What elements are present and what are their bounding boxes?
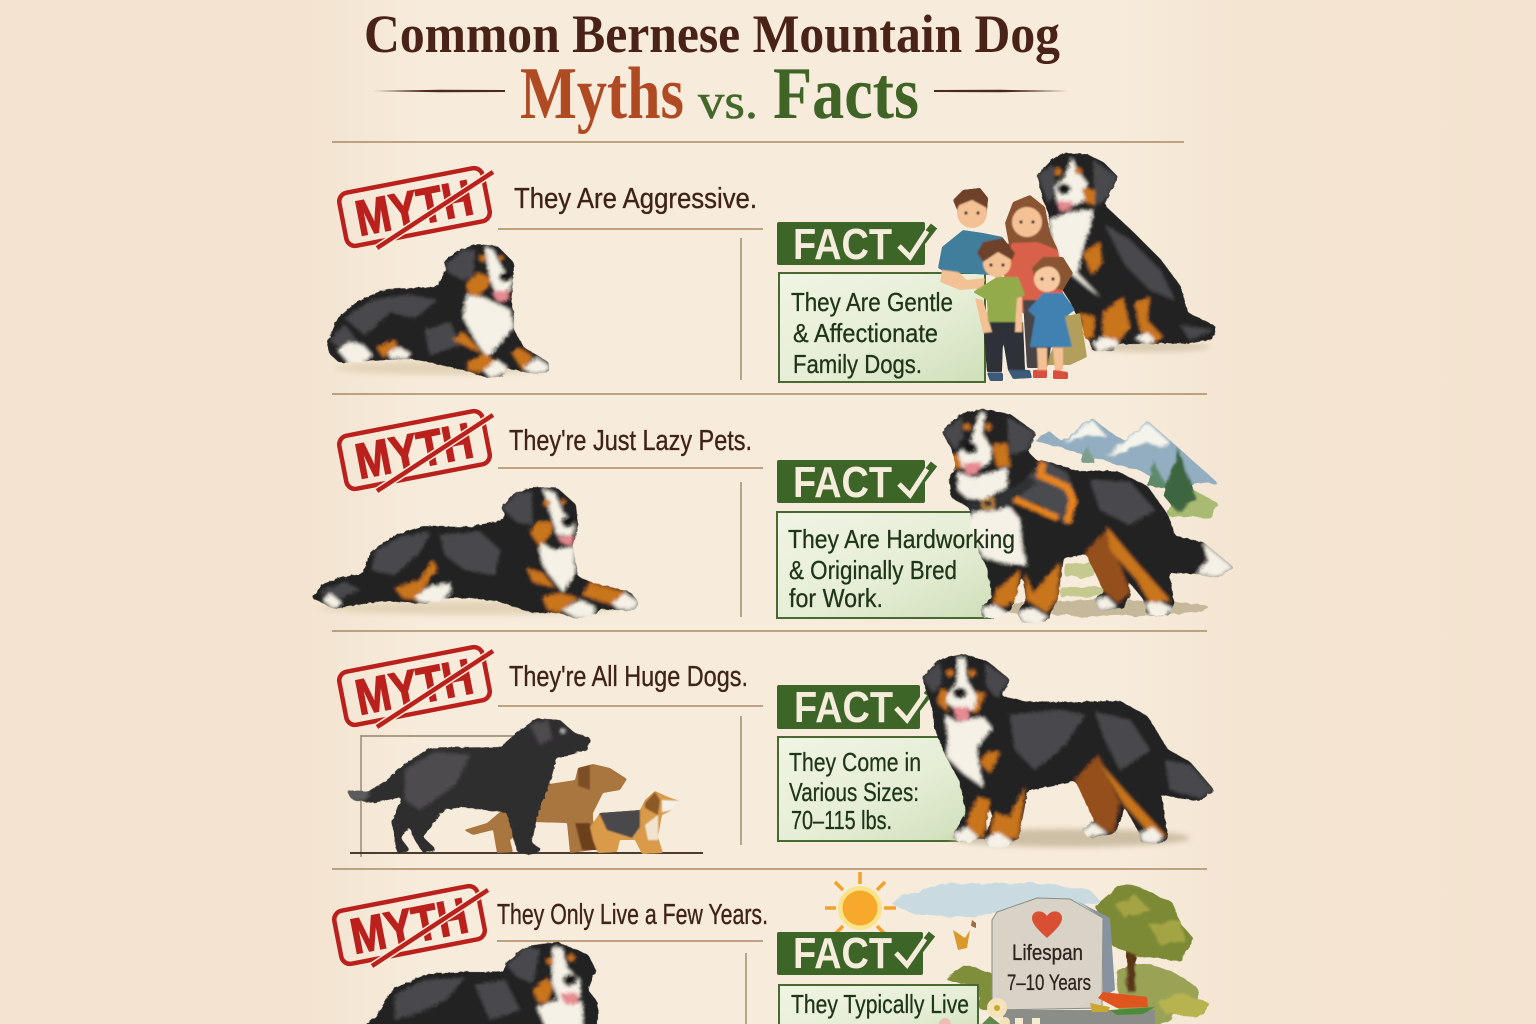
myth 4 statement: They Only Live a Few Years. xyxy=(497,899,768,931)
fact 3 text: Various Sizes: xyxy=(789,777,919,807)
title: Facts xyxy=(773,53,919,135)
size comparison of three dogs xyxy=(346,718,703,857)
myth 3 statement: They're All Huge Dogs. xyxy=(509,661,748,693)
fact 1 text: & Affectionate xyxy=(793,318,938,348)
panel: fact 2 xyxy=(777,410,1232,622)
dog sitting, family xyxy=(1038,154,1215,351)
fact text box 2 xyxy=(777,512,993,618)
title: vs. xyxy=(698,73,758,129)
illustration: trees and bushes xyxy=(945,883,1210,1024)
large black dog xyxy=(346,718,591,855)
fact text box 4 xyxy=(779,985,978,1024)
myth stamp 1: MYTH xyxy=(351,169,477,247)
myth stamp 3: MYTH xyxy=(351,648,477,726)
fact 1 text: They Are Gentle xyxy=(791,287,953,317)
illustration: tombstone with lifespan text xyxy=(992,898,1155,1024)
fact 3 text: They Come in xyxy=(789,747,921,777)
fact 3 text xyxy=(789,747,921,835)
panel: myth 4 xyxy=(333,885,768,1024)
dog lying, row 4 xyxy=(360,943,597,1024)
dog standing, side view xyxy=(923,655,1213,848)
title xyxy=(364,4,1068,135)
dog standing with harness xyxy=(943,410,1232,622)
illustration: tombstone with lifespan text: Lifespan xyxy=(1012,940,1083,965)
small brown dog and beagle xyxy=(464,764,680,854)
illustration: memorial flowers xyxy=(1000,992,1155,1024)
white flower xyxy=(939,998,1007,1024)
fact 1 text: Family Dogs. xyxy=(793,349,922,379)
fact badge 2: FACT xyxy=(793,458,892,507)
fact 1 text xyxy=(791,287,953,379)
illustration: mountains and trees xyxy=(990,418,1218,616)
fact 2 text: & Originally Bred xyxy=(789,555,957,585)
fact badge 4: FACT xyxy=(793,929,892,978)
fact 2 text: They Are Hardworking xyxy=(788,524,1015,554)
illustration: family xyxy=(938,188,1087,381)
panel: myth 1 xyxy=(328,167,757,377)
myth stamp 4: MYTH xyxy=(346,887,472,965)
myth 1 statement: They Are Aggressive. xyxy=(514,183,757,215)
panel: myth 3 xyxy=(338,646,748,857)
myth 2 statement: They're Just Lazy Pets. xyxy=(509,425,752,457)
myth stamp 2: MYTH xyxy=(351,412,477,490)
fact 4 text: They Typically Live xyxy=(791,989,969,1019)
fact badge 3: FACT xyxy=(794,683,893,732)
fact text box 1 xyxy=(779,273,985,382)
fact badge 1: FACT xyxy=(793,220,892,269)
panel: fact 1 xyxy=(777,154,1215,382)
panel: myth 2 xyxy=(313,410,752,618)
illustration: sky, sun and butterflies xyxy=(825,872,1102,950)
fact 3 text: 70–115 lbs. xyxy=(791,805,892,835)
fact 2 text: for Work. xyxy=(789,583,883,613)
dog lying, row 2 xyxy=(313,488,638,618)
fact text box 3 xyxy=(778,737,968,841)
title: Myths xyxy=(520,53,684,135)
illustration: tombstone with lifespan text: 7–10 Years xyxy=(1007,970,1091,995)
dog lying, row 1 xyxy=(328,245,548,377)
fact 2 text xyxy=(788,524,1015,613)
panel: fact 3 xyxy=(777,655,1213,848)
title: Common Bernese Mountain Dog xyxy=(364,4,1060,64)
panel: fact 4 xyxy=(777,872,1210,1024)
